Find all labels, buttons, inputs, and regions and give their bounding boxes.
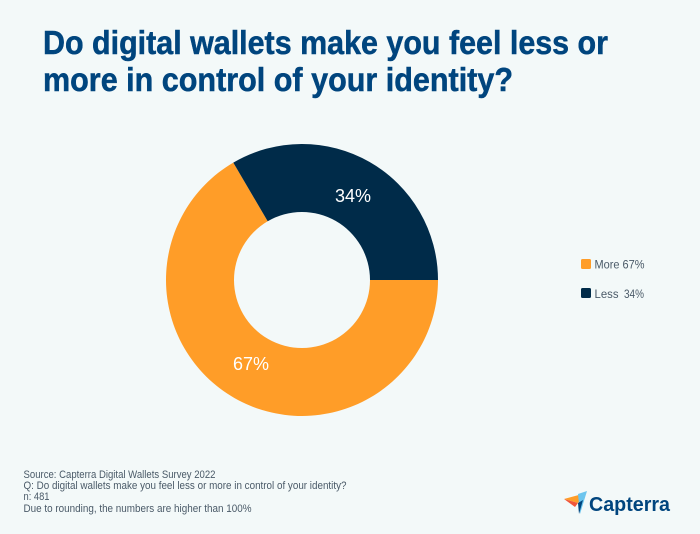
title (43, 24, 608, 98)
source notes: Source: Capterra Digital Wallets Survey 2022 (24, 469, 216, 481)
capterra logo (564, 491, 671, 516)
legend item: Less: 34% (624, 289, 644, 301)
title: more in control of your identity? (43, 61, 513, 98)
source notes: Due to rounding, the numbers are higher than 100% (24, 503, 252, 515)
segment: More 67% (166, 163, 438, 416)
value label: 34%: 34% (335, 186, 371, 206)
donut chart (166, 144, 438, 416)
legend item: Less (581, 288, 644, 301)
wordmark: Capterra (589, 494, 671, 516)
legend item: Less: Less (594, 289, 619, 301)
legend item: More: More 67% (594, 260, 644, 272)
segment: Less 34% (233, 144, 438, 280)
source notes (24, 469, 346, 515)
source notes: n: 481 (24, 491, 50, 503)
title: Do digital wallets make you feel less or (43, 24, 608, 61)
legend (581, 259, 644, 301)
value label: 67%: 67% (233, 354, 269, 374)
source notes: Q: Do digital wallets make you feel less or more in control of your identity? (24, 480, 346, 492)
icon: capterra arrow (564, 491, 587, 514)
